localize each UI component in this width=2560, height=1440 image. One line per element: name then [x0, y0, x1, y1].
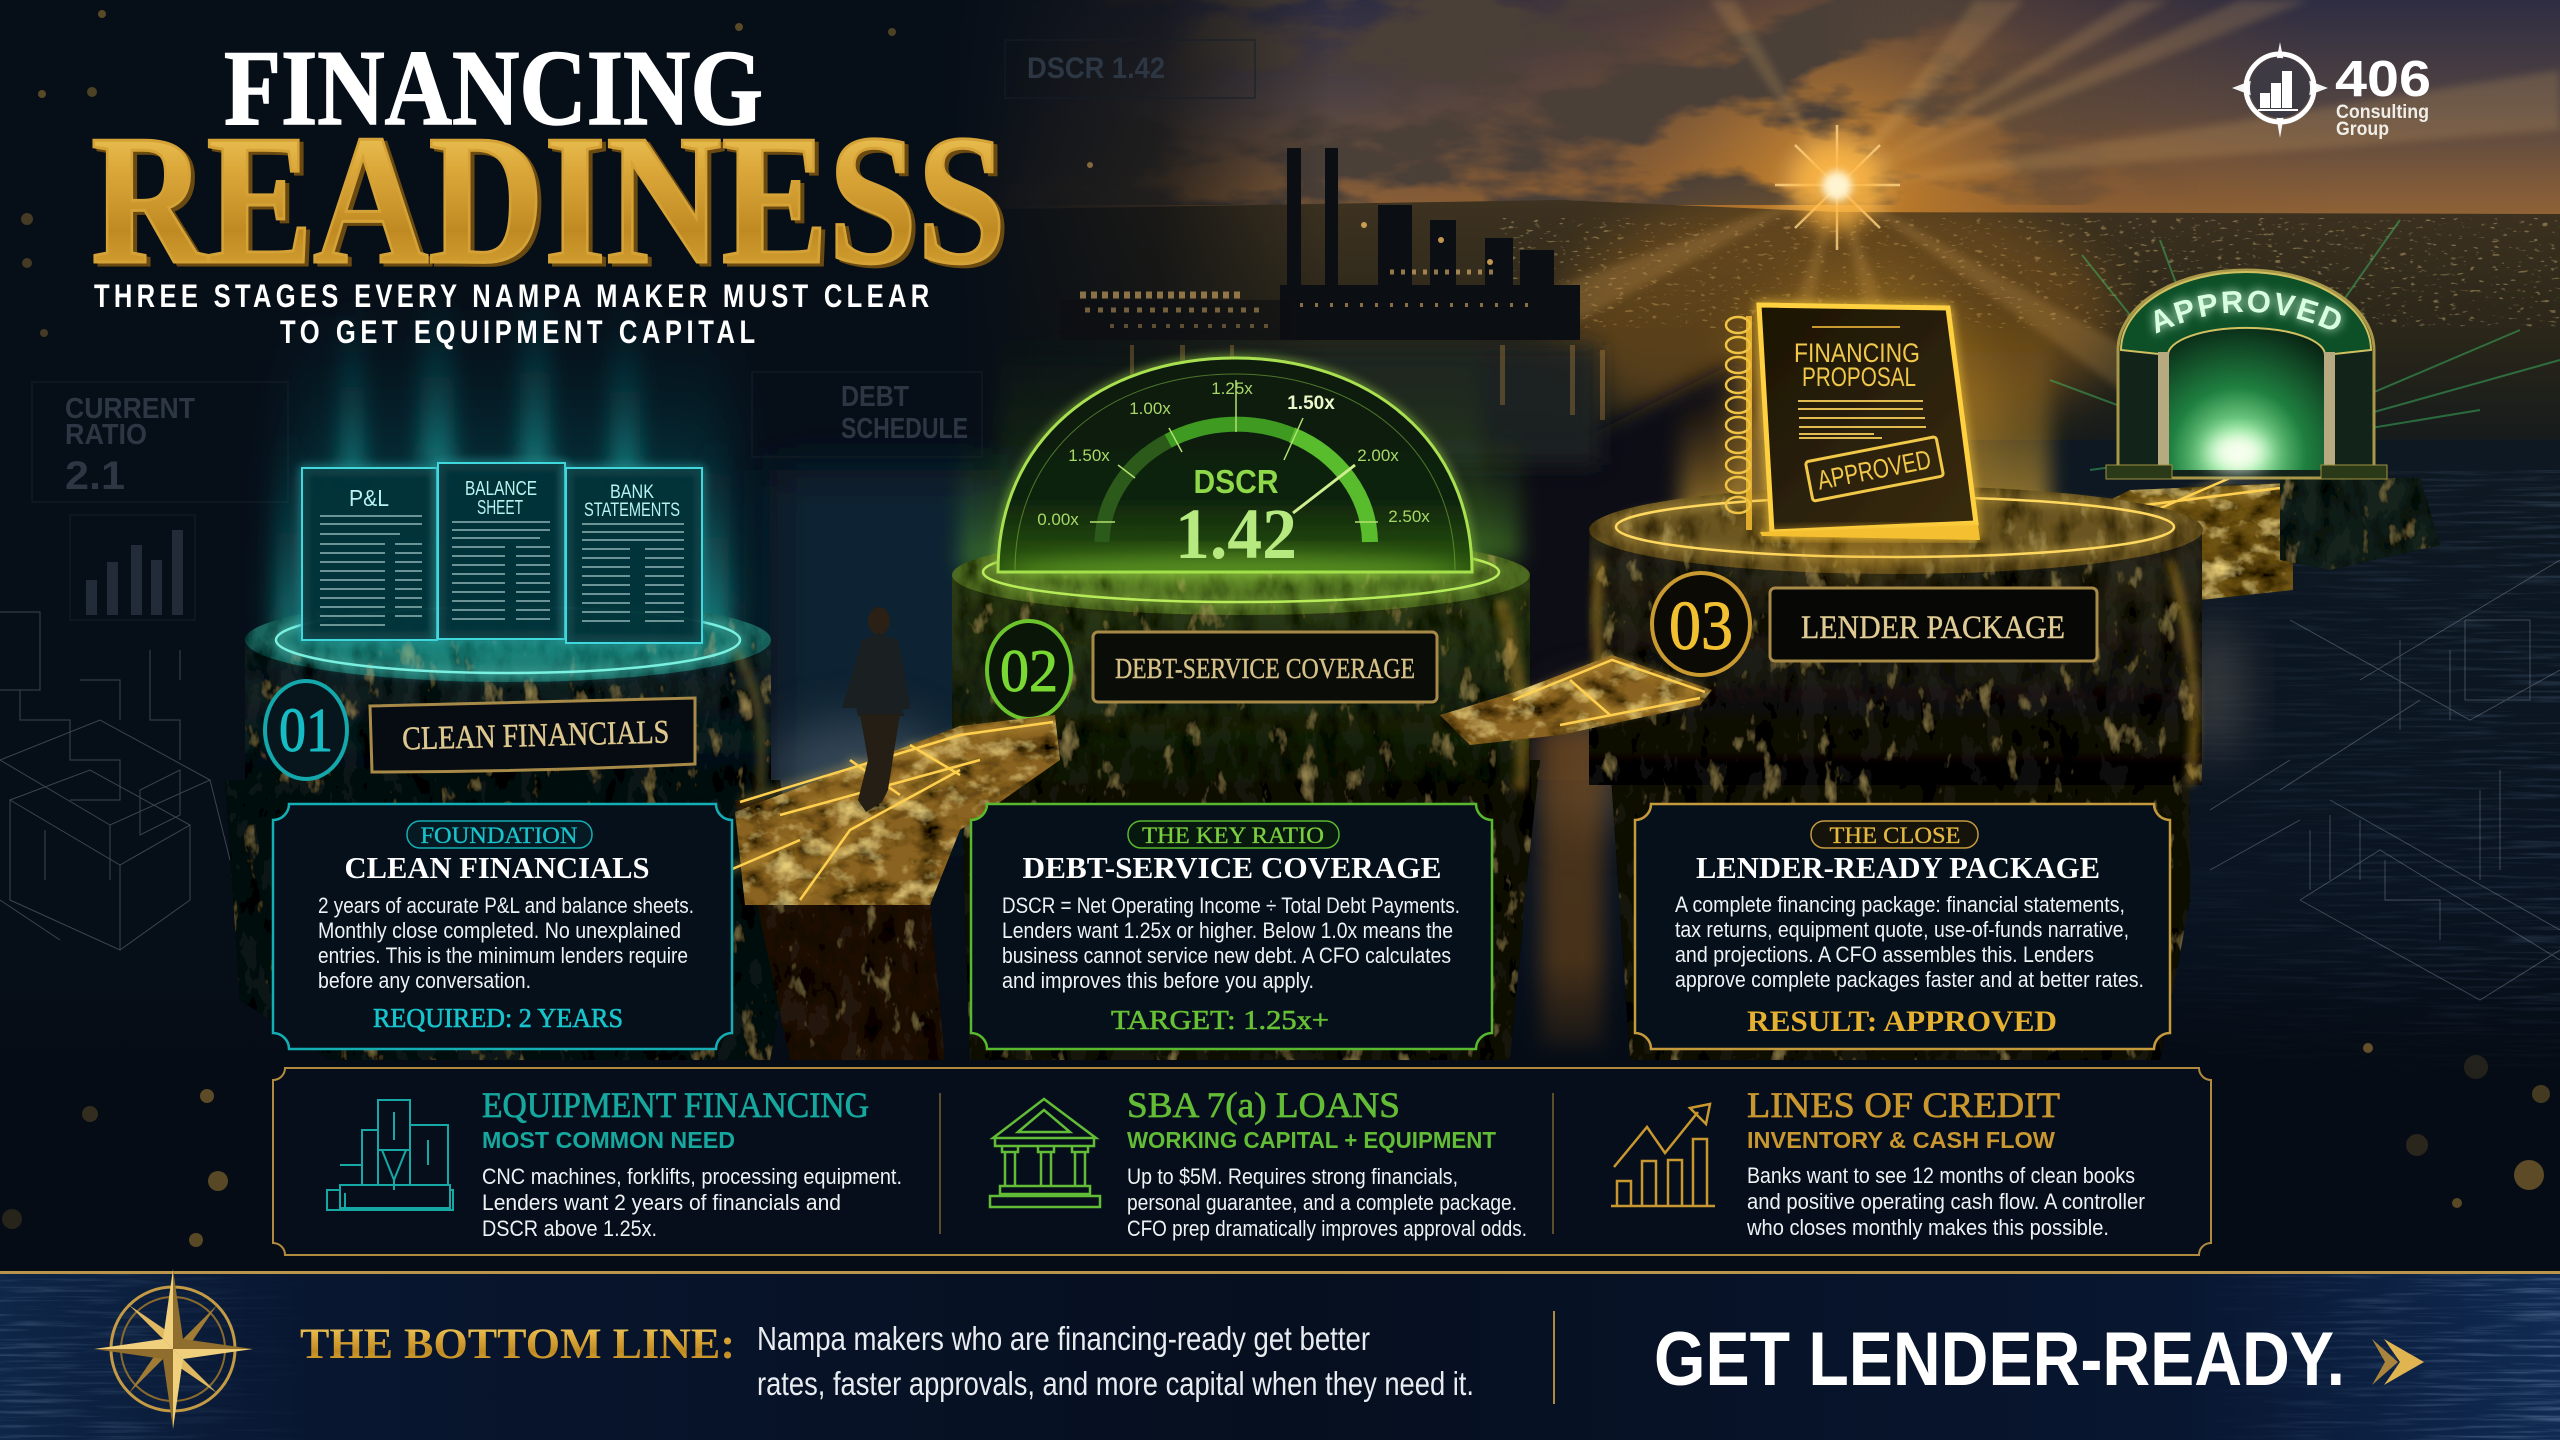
panel: financing types: [273, 1068, 2211, 1255]
SBA loans column: WORKING CAPITAL + EQUIPMENT: [1127, 1127, 1496, 1153]
panel: debt-service coverage: DSCR = Net Operating Income ÷ Total Debt Payments.: [1002, 893, 1460, 918]
ghost labels: CURRENT: [65, 393, 195, 425]
lines of credit column: who closes monthly makes this possible.: [1746, 1215, 2109, 1240]
logo: 406 Consulting Group: Consulting: [2336, 102, 2429, 123]
bottom banner: THE BOTTOM LINE:: [300, 1321, 735, 1368]
panel: debt-service coverage: Lenders want 1.25x or higher. Below 1.0x means the: [1002, 918, 1453, 943]
book: Financing Proposal: FINANCING: [1794, 338, 1920, 368]
ghost labels: 2.1: [65, 454, 125, 498]
gauge scale labels: 2.00x: [1357, 446, 1399, 465]
panel: debt-service coverage: business cannot service new debt. A CFO calculates: [1002, 943, 1451, 968]
logo: 406 Consulting Group: 406: [2335, 50, 2431, 107]
logo: 406 Consulting Group: [2232, 42, 2431, 140]
plate: Lender Package: LENDER PACKAGE: [1801, 610, 2065, 646]
stage 2 pedestal with DSCR gauge: [952, 330, 1530, 790]
panel: lender-ready package: and projections. A CFO assembles this. Lenders: [1675, 942, 2094, 967]
gauge scale labels: 1.00x: [1129, 399, 1171, 418]
plate: Clean Financials: CLEAN FINANCIALS: [402, 715, 670, 757]
ghost labels: SCHEDULE: [841, 413, 968, 445]
ghost labels: DEBT: [841, 381, 909, 413]
equipment financing column: DSCR above 1.25x.: [482, 1216, 657, 1241]
lines of credit column: and positive operating cash flow. A controller: [1747, 1189, 2145, 1214]
panel: debt-service coverage: TARGET: 1.25x+: [1111, 1005, 1329, 1035]
approved archway: APPROVED: [2147, 284, 2348, 338]
plate: Clean Financials: [370, 698, 695, 772]
panel: lender-ready package: RESULT: APPROVED: [1747, 1005, 2057, 1038]
needle: [1293, 465, 1355, 513]
document: P&L: P&L: [349, 485, 389, 511]
SBA loans column: CFO prep dramatically improves approval odds.: [1127, 1216, 1527, 1241]
green light beams: [960, 330, 1520, 570]
gauge scale labels: 1.50x: [1068, 446, 1110, 465]
title block: TO GET EQUIPMENT CAPITAL: [280, 315, 755, 351]
badge 01: 01: [279, 697, 333, 765]
pedestal rock: [952, 535, 1530, 790]
gauge scale labels: 0.00x: [1037, 510, 1079, 529]
SBA loans column: Up to $5M. Requires strong financials,: [1127, 1164, 1458, 1189]
panel: lender-ready package: [1635, 804, 2170, 1049]
lines of credit column: Banks want to see 12 months of clean books: [1747, 1163, 2135, 1188]
equipment financing column: EQUIPMENT FINANCING: [482, 1085, 869, 1125]
panel: lender-ready package: tax returns, equipment quote, use-of-funds narrative,: [1675, 917, 2129, 942]
gauge scale labels: 2.50x: [1388, 507, 1430, 526]
sun with rays: [1520, 0, 2560, 520]
document: Bank Statements: BANK: [610, 482, 654, 503]
lines of credit column: INVENTORY & CASH FLOW: [1747, 1127, 2055, 1153]
blueprint sketches: [0, 560, 2560, 1000]
logo: 406 Consulting Group: Group: [2336, 119, 2389, 140]
pedestal rock: [245, 598, 771, 810]
badge 02: [987, 621, 1071, 719]
equipment financing column: [327, 1085, 902, 1241]
lower cliffs under stages: [225, 760, 2190, 1060]
golden bridge from stage 2: [1440, 655, 1712, 745]
gauge scale labels: [1037, 379, 1430, 529]
panel: debt-service coverage: [971, 804, 1492, 1049]
bottom banner: [0, 1269, 2560, 1440]
stage 3 pedestal with financing proposal: [1440, 270, 2203, 785]
panel: clean financials: before any conversation.: [318, 968, 531, 993]
plate: Lender Package: [1770, 588, 2097, 661]
panel: clean financials: Monthly close completed. No unexplained: [318, 918, 681, 943]
document: Bank Statements: [566, 468, 702, 643]
gauge scale labels: 1.50x: [1287, 393, 1335, 414]
arch radiating lines: [2050, 220, 2560, 470]
gauge scale labels: 1.25x: [1211, 379, 1253, 398]
SBA loans column: [990, 1085, 1527, 1241]
equipment financing column: CNC machines, forklifts, processing equipment.: [482, 1164, 902, 1189]
plate: Debt-Service Coverage: [1093, 632, 1437, 702]
bottom banner: GET LENDER-READY.: [1654, 1317, 2345, 1402]
bottom banner: Nampa makers who are financing-ready get better: [757, 1320, 1370, 1357]
badge 03: 03: [1669, 588, 1733, 665]
title block: READINESS: [91, 97, 1006, 303]
document: Balance Sheet: BALANCE: [465, 478, 537, 500]
gauge arc: [1102, 441, 1168, 542]
panel: clean financials: CLEAN FINANCIALS: [344, 850, 650, 885]
title block: [91, 29, 1006, 351]
bottom banner: rates, faster approvals, and more capital when they need it.: [757, 1365, 1474, 1402]
traveler silhouette: [842, 607, 911, 812]
panel: lender-ready package: THE CLOSE: [1830, 823, 1960, 848]
panel: clean financials: 2 years of accurate P&L and balance sheets.: [318, 893, 694, 918]
approved stamp: APPROVED: [1815, 444, 1933, 496]
title block: THREE STAGES EVERY NAMPA MAKER MUST CLEAR: [94, 279, 929, 315]
lines of credit column: LINES OF CREDIT: [1747, 1085, 2060, 1125]
panel: debt-service coverage: THE KEY RATIO: [1142, 823, 1324, 848]
gauge dome: 1.42: [1175, 494, 1297, 574]
badge 03: [1652, 573, 1750, 675]
title block: FINANCING: [224, 29, 763, 148]
plate: Debt-Service Coverage: DEBT-SERVICE COVERAGE: [1115, 653, 1415, 685]
book: Financing Proposal: PROPOSAL: [1802, 362, 1916, 392]
document: Balance Sheet: [438, 463, 565, 639]
badge 01: [265, 681, 347, 779]
arrow: gold chevrons: [2372, 1339, 2424, 1385]
golden stepping-stone path to stage 2 and archway: [730, 463, 2293, 905]
panel: debt-service coverage: DEBT-SERVICE COVERAGE: [1022, 850, 1442, 885]
ghost labels: [32, 40, 1255, 620]
panel: lender-ready package: approve complete packages faster and at better rates.: [1675, 967, 2144, 992]
icon: gold compass: [94, 1269, 253, 1429]
panel: clean financials: entries. This is the minimum lenders require: [318, 943, 688, 968]
panel: clean financials: REQUIRED: 2 YEARS: [373, 1003, 623, 1033]
background: night scene: [758, 0, 2560, 1049]
equipment financing column: MOST COMMON NEED: [482, 1127, 735, 1153]
document: Bank Statements: STATEMENTS: [584, 500, 680, 521]
gauge dome: [998, 358, 1472, 586]
ghost labels: RATIO: [65, 419, 147, 451]
gauge dome: DSCR: [1194, 463, 1279, 500]
panel: debt-service coverage: and improves this before you apply.: [1002, 968, 1314, 993]
document: P&L: [302, 468, 437, 640]
icon: bank building: [990, 1099, 1100, 1207]
panel: lender-ready package: LENDER-READY PACKAGE: [1696, 850, 2100, 885]
teal light beams: [276, 270, 730, 640]
approved archway: [2050, 220, 2560, 570]
SBA loans column: personal guarantee, and a complete package.: [1127, 1190, 1517, 1215]
stage 1 pedestal with documents: [245, 270, 771, 810]
panel: clean financials: [273, 804, 732, 1049]
panel: clean financials: FOUNDATION: [420, 823, 578, 848]
factory skyline: [1060, 148, 1605, 420]
document: Balance Sheet: SHEET: [477, 497, 523, 519]
panel: lender-ready package: A complete financing package: financial statements,: [1675, 892, 2125, 917]
lines of credit column: [1611, 1085, 2145, 1240]
equipment financing column: Lenders want 2 years of financials and: [482, 1190, 841, 1215]
icon: growth chart: [1611, 1104, 1715, 1206]
badge 02: 02: [1000, 638, 1058, 704]
SBA loans column: SBA 7(a) LOANS: [1127, 1085, 1400, 1125]
book: Financing Proposal: [1726, 270, 1990, 570]
gold light beams: [1680, 280, 2050, 540]
pedestal rock: [1589, 486, 2203, 785]
icon: CNC machine: [327, 1100, 453, 1210]
ghost labels: DSCR 1.42: [1027, 52, 1165, 85]
